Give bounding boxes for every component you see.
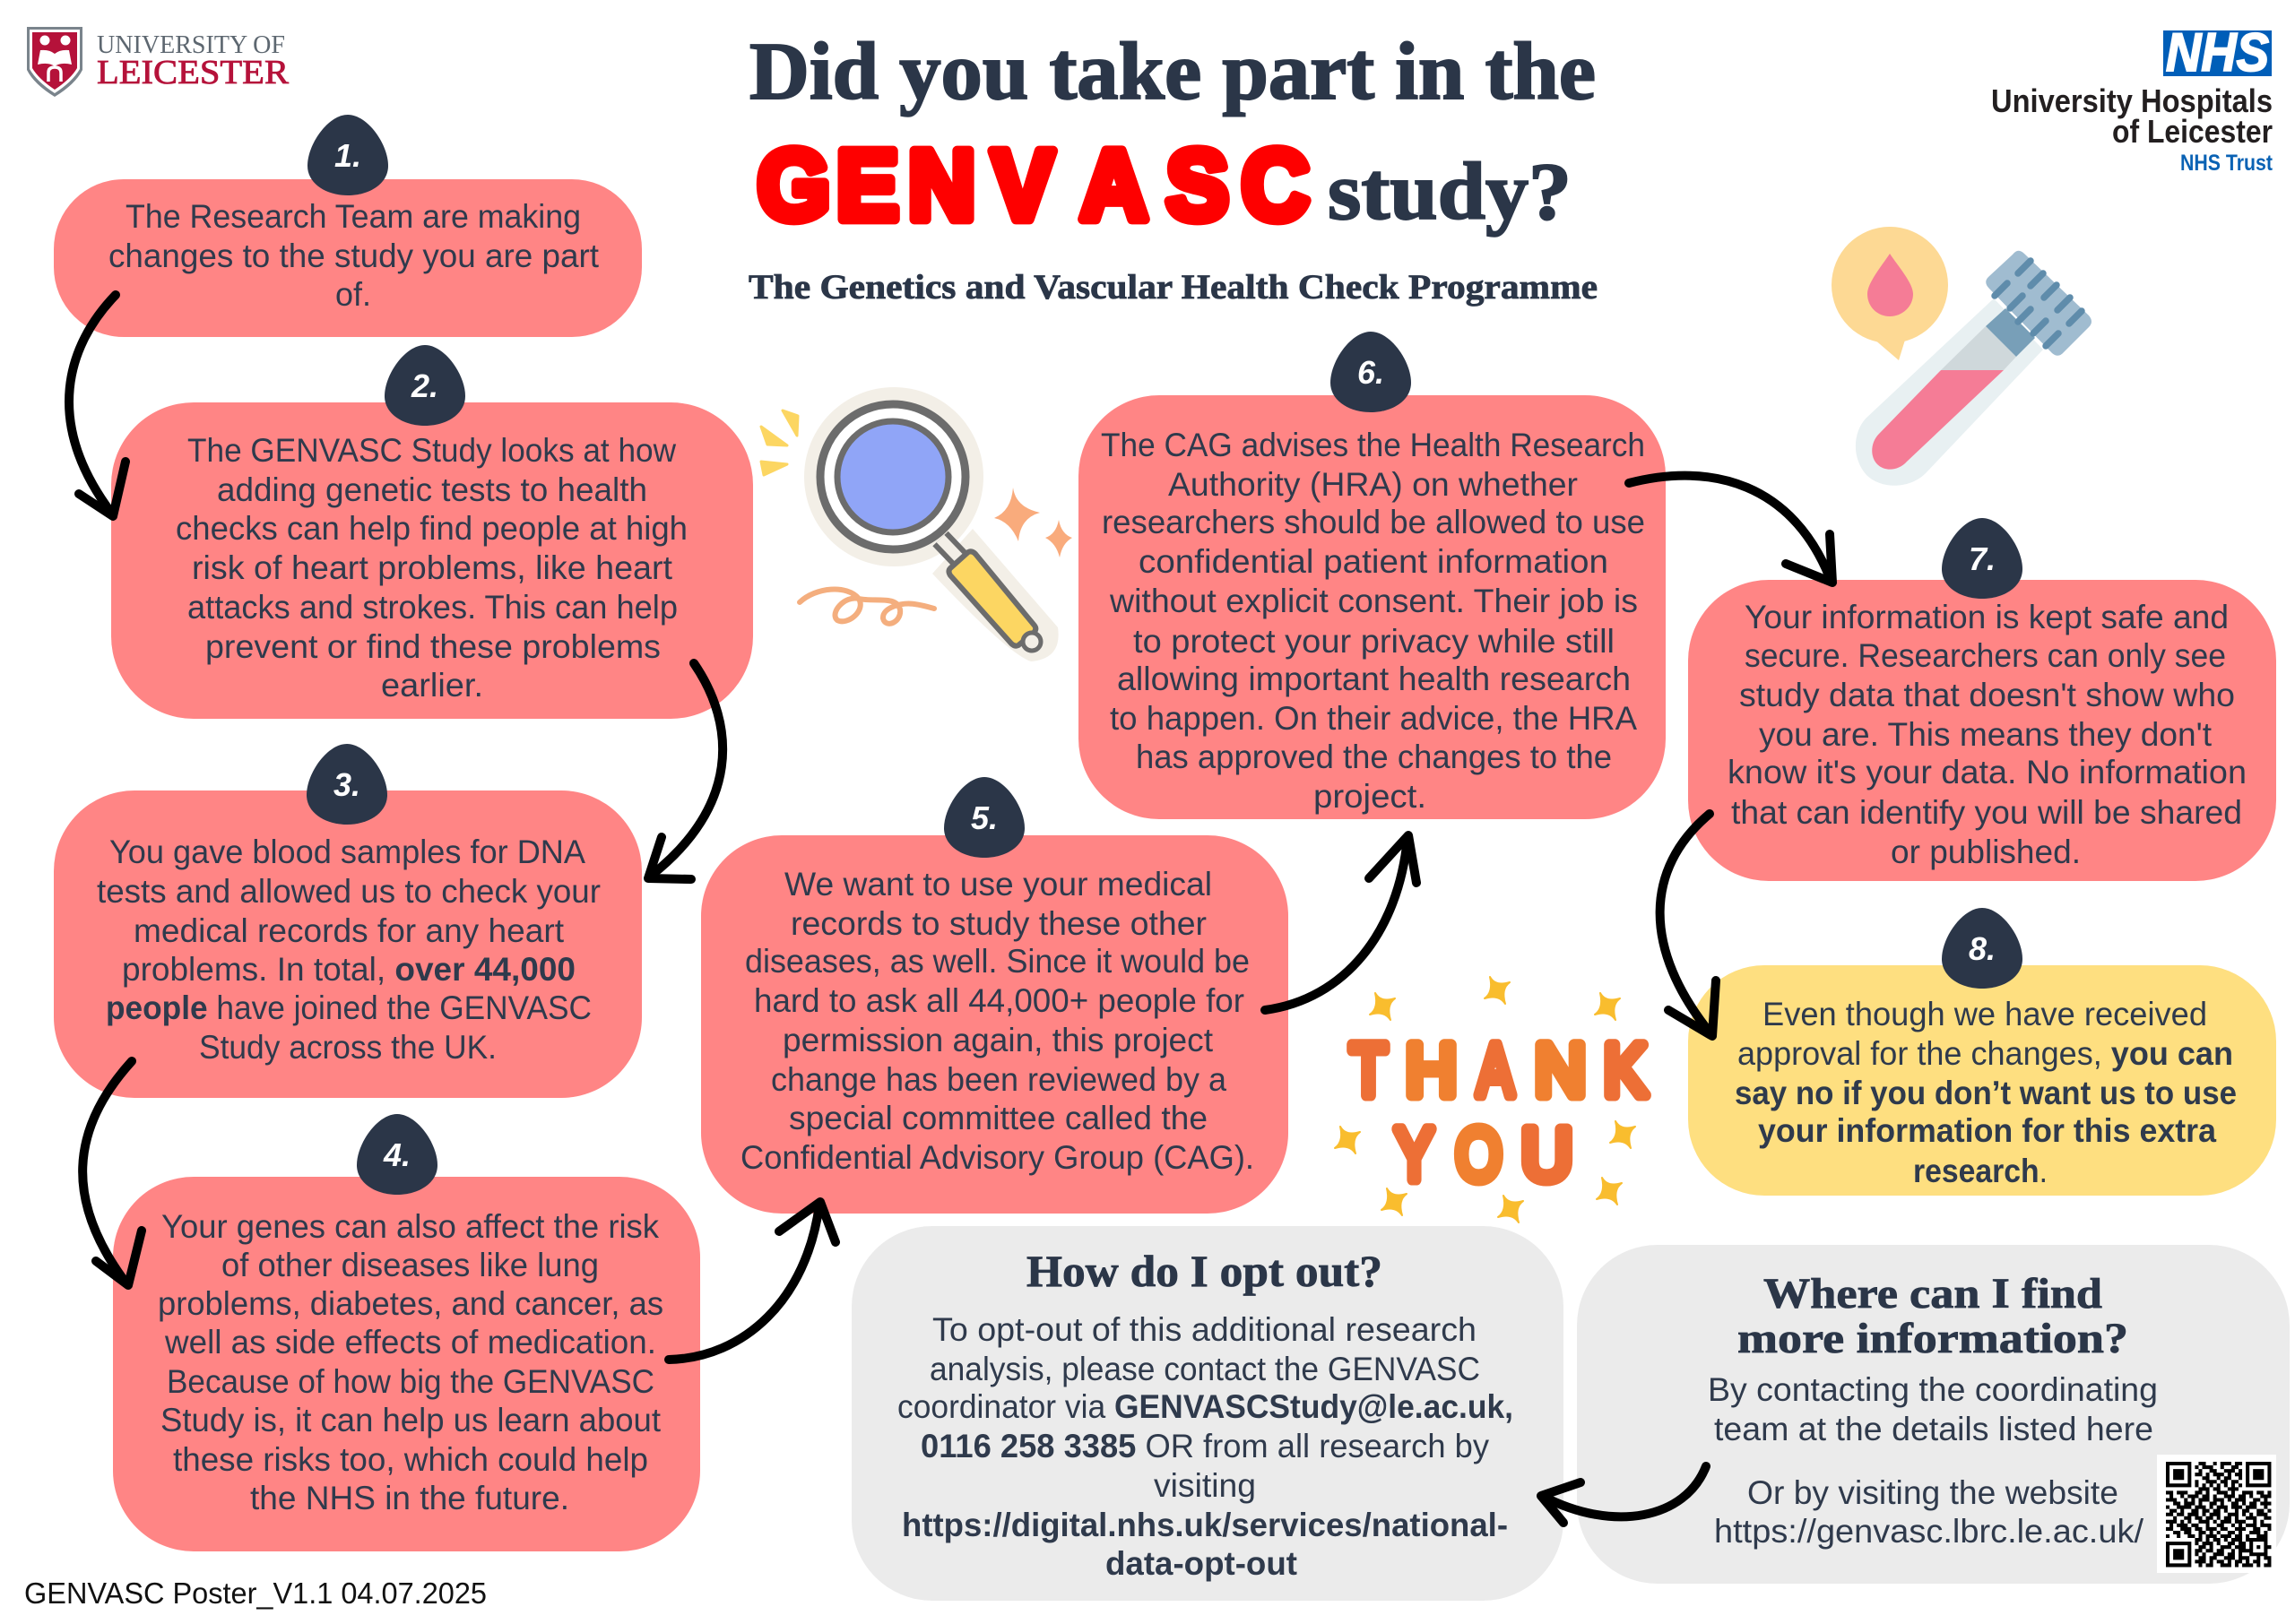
arrow: step 2 to step 3	[648, 663, 723, 879]
text: step 4: Your genes can also affect the risk	[161, 1208, 659, 1245]
text: step 3: Study across the UK.	[199, 1029, 497, 1066]
illustration: thank you: U	[1521, 1114, 1572, 1196]
heading: how do I opt out: How do I opt out?	[1026, 1246, 1382, 1296]
text: step 8: research.	[1913, 1153, 2048, 1189]
badge: 2	[385, 345, 465, 426]
text: step 5: hard to ask all 44,000+ people for	[754, 982, 1244, 1019]
text: step 2: prevent or find these problems	[205, 628, 661, 665]
badge: 8: 8.	[1969, 930, 1996, 967]
heading: where can I find more information: more information?	[1737, 1315, 2128, 1362]
text: step 7: or published.	[1891, 834, 2081, 870]
text: opt out instructions: coordinator via GENVASCStudy@le.ac.uk,	[897, 1388, 1513, 1425]
text: step 7: study data that doesn't show who	[1739, 677, 2235, 713]
text: step 4: problems, diabetes, and cancer, as	[158, 1285, 663, 1322]
illustration: thank you	[1335, 977, 1647, 1222]
heading: where can I find more information: Where can I find	[1763, 1270, 2102, 1317]
text: step 3: medical records for any heart	[134, 912, 565, 949]
text: step 6: The CAG advises the Health Research	[1101, 427, 1645, 463]
text: step 8: Even though we have received	[1762, 996, 2207, 1032]
text: step 6: has approved the changes to the	[1136, 739, 1612, 775]
illustration: thank you: O	[1456, 1114, 1502, 1196]
text: step 2: earlier.	[381, 667, 483, 704]
text: step 5: diseases, as well. Since it would be	[745, 943, 1250, 980]
icon: magnifying glass	[761, 387, 1072, 661]
text: opt out instructions: 0116 258 3385 OR from all research by	[921, 1428, 1489, 1464]
QR code	[2157, 1455, 2276, 1573]
footer version label: GENVASC Poster_V1.1 04.07.2025	[24, 1576, 487, 1610]
text: contact details: By contacting the coordinating	[1708, 1371, 2158, 1408]
text: step 8: say no if you don’t want us to use	[1735, 1075, 2237, 1111]
panel: step 7	[1688, 518, 2276, 881]
text: opt out instructions: https://digital.nhs.uk/services/national-	[902, 1507, 1508, 1543]
badge: 3	[307, 744, 387, 825]
text: step 3: tests and allowed us to check your	[97, 873, 601, 910]
title	[749, 26, 1596, 240]
text: step 6: allowing important health research	[1117, 661, 1631, 697]
arrow: step 3 to step 4	[82, 1061, 142, 1285]
badge: 1: 1.	[334, 137, 361, 174]
text: step 5: Confidential Advisory Group (CAG).	[740, 1139, 1254, 1176]
text: contact details: https://genvasc.lbrc.le.ac.uk/	[1714, 1513, 2144, 1550]
arrow: step 4 to step 5	[669, 1202, 836, 1360]
text: step 7: you are. This means they don't	[1759, 716, 2213, 753]
text: step 1: The Research Team are making	[126, 198, 581, 235]
logo: NHS University Hospitals of Leicester: NHS Trust	[2180, 151, 2273, 176]
arrow: step 7 to step 8	[1660, 814, 1716, 1036]
badge: 4: 4.	[383, 1136, 411, 1173]
text: opt out instructions	[897, 1311, 1513, 1582]
text: step 6: Authority (HRA) on whether	[1168, 466, 1578, 503]
illustration: thank you: N	[1535, 1030, 1586, 1111]
text: opt out instructions: data-opt-out	[1105, 1545, 1297, 1582]
text: step 4: Because of how big the GENVASC	[167, 1363, 654, 1400]
text: step 3	[97, 834, 601, 1066]
logo: NHS University Hospitals of Leicester: NHS	[2166, 22, 2269, 82]
panel: step 3	[54, 744, 642, 1098]
illustration: thank you: Y	[1395, 1114, 1433, 1196]
text: step 5	[740, 866, 1254, 1176]
heading: where can I find more information	[1737, 1270, 2128, 1362]
logo: NHS University Hospitals of Leicester: University Hospitals	[1991, 82, 2273, 119]
title: study?	[1328, 146, 1572, 237]
arrow: more information to opt out	[1541, 1466, 1706, 1523]
text: step 6	[1101, 427, 1645, 815]
panel: step 2	[111, 345, 753, 719]
text: step 4: Study is, it can help us learn about	[160, 1402, 662, 1438]
title: Did you take part in the	[749, 26, 1596, 117]
icon: blood drop speech bubble	[1832, 227, 1948, 360]
logo: University of Leicester: LEICESTER	[97, 54, 290, 91]
badge: 4	[357, 1114, 437, 1195]
logo: NHS University Hospitals of Leicester: of Leicester	[2112, 113, 2273, 150]
text: step 5: permission again, this project	[783, 1022, 1214, 1058]
text: step 2: adding genetic tests to health	[217, 471, 647, 508]
text: step 3: problems. In total, over 44,000	[122, 951, 576, 988]
panel: step 1	[54, 115, 642, 337]
text: step 2: risk of heart problems, like heart	[192, 549, 673, 586]
panel: how do I opt out	[852, 1226, 1563, 1601]
text: step 5: We want to use your medical	[784, 866, 1212, 903]
text: step 1: of.	[335, 276, 371, 313]
badge: 5	[944, 777, 1025, 858]
text: step 1: changes to the study you are part	[108, 238, 600, 274]
panel: step 4	[113, 1114, 700, 1551]
title: GENVASC	[758, 130, 1309, 240]
text: step 2: checks can help find people at high	[176, 510, 688, 547]
text: step 4	[158, 1208, 663, 1516]
text: step 2: The GENVASC Study looks at how	[187, 432, 676, 469]
text: step 3: You gave blood samples for DNA	[109, 834, 585, 870]
panel: step 5	[701, 777, 1288, 1214]
arrow: step 6 to step 7	[1629, 476, 1832, 583]
logo: NHS University Hospitals of Leicester	[1991, 22, 2273, 176]
arrow: step 5 to step 6	[1265, 835, 1416, 1010]
text: step 8: approval for the changes, you can	[1737, 1035, 2233, 1072]
text: step 5: records to study these other	[791, 905, 1207, 942]
badge: 1	[307, 115, 388, 195]
badge: 3: 3.	[333, 766, 360, 803]
text: step 4: well as side effects of medication.	[164, 1324, 656, 1361]
text: step 2	[176, 432, 688, 704]
logo: University of Leicester: UNIVERSITY OF	[97, 31, 285, 59]
text: step 6: confidential patient information	[1139, 543, 1608, 580]
illustration: thank you: A	[1477, 1030, 1513, 1111]
text: step 3: people have joined the GENVASC	[106, 989, 592, 1026]
badge: 8	[1942, 908, 2022, 989]
text: opt out instructions: analysis, please contact the GENVASC	[930, 1351, 1480, 1387]
text: step 6: to protect your privacy while still	[1133, 623, 1615, 660]
text: step 5: special committee called the	[789, 1100, 1208, 1136]
panel: step 6	[1078, 332, 1666, 819]
text: step 6: without explicit consent. Their job is	[1109, 583, 1638, 619]
badge: 7	[1942, 518, 2022, 599]
illustration: thank you: T	[1350, 1030, 1387, 1111]
text: step 7: that can identify you will be shared	[1731, 794, 2242, 831]
text: opt out instructions: visiting	[1154, 1467, 1256, 1504]
text: step 6: project.	[1313, 778, 1426, 815]
panel: step 8	[1688, 908, 2276, 1196]
badge: 6: 6.	[1357, 354, 1384, 391]
panel: where can I find more information	[1577, 1245, 2290, 1584]
text: step 8: your information for this extra	[1758, 1112, 2216, 1149]
text: step 7: Your information is kept safe and	[1745, 599, 2229, 635]
text: step 7: know it's your data. No information	[1728, 754, 2247, 790]
badge: 7: 7.	[1969, 540, 1996, 577]
badge: 2: 2.	[411, 367, 438, 404]
text: step 5: change has been reviewed by a	[771, 1061, 1226, 1098]
illustration: thank you: K	[1604, 1030, 1647, 1111]
badge: 6	[1330, 332, 1411, 412]
text: step 8	[1735, 996, 2237, 1189]
arrow: step 1 to step 2	[69, 295, 126, 516]
text: step 7: secure. Researchers can only see	[1745, 637, 2226, 674]
text: opt out instructions: To opt-out of this additional research	[932, 1311, 1477, 1348]
text: step 7	[1728, 599, 2247, 870]
text: step 1	[108, 198, 600, 313]
badge: 5: 5.	[971, 799, 998, 836]
text: step 4: the NHS in the future.	[250, 1480, 569, 1516]
text: step 4: these risks too, which could help	[173, 1441, 648, 1478]
text: contact details: team at the details listed here	[1714, 1411, 2153, 1447]
text: step 4: of other diseases like lung	[221, 1247, 599, 1283]
subtitle: The Genetics and Vascular Health Check Programme	[749, 268, 1598, 307]
text: step 2: attacks and strokes. This can help	[187, 589, 678, 626]
text: step 6: to happen. On their advice, the HRA	[1110, 700, 1637, 737]
text: contact details	[1708, 1371, 2158, 1550]
text: contact details: Or by visiting the website	[1747, 1474, 2118, 1511]
illustration: thank you: H	[1406, 1030, 1457, 1111]
logo: University of Leicester	[27, 27, 290, 97]
icon: test tube	[1856, 251, 2091, 486]
text: step 6: researchers should be allowed to use	[1102, 504, 1645, 540]
